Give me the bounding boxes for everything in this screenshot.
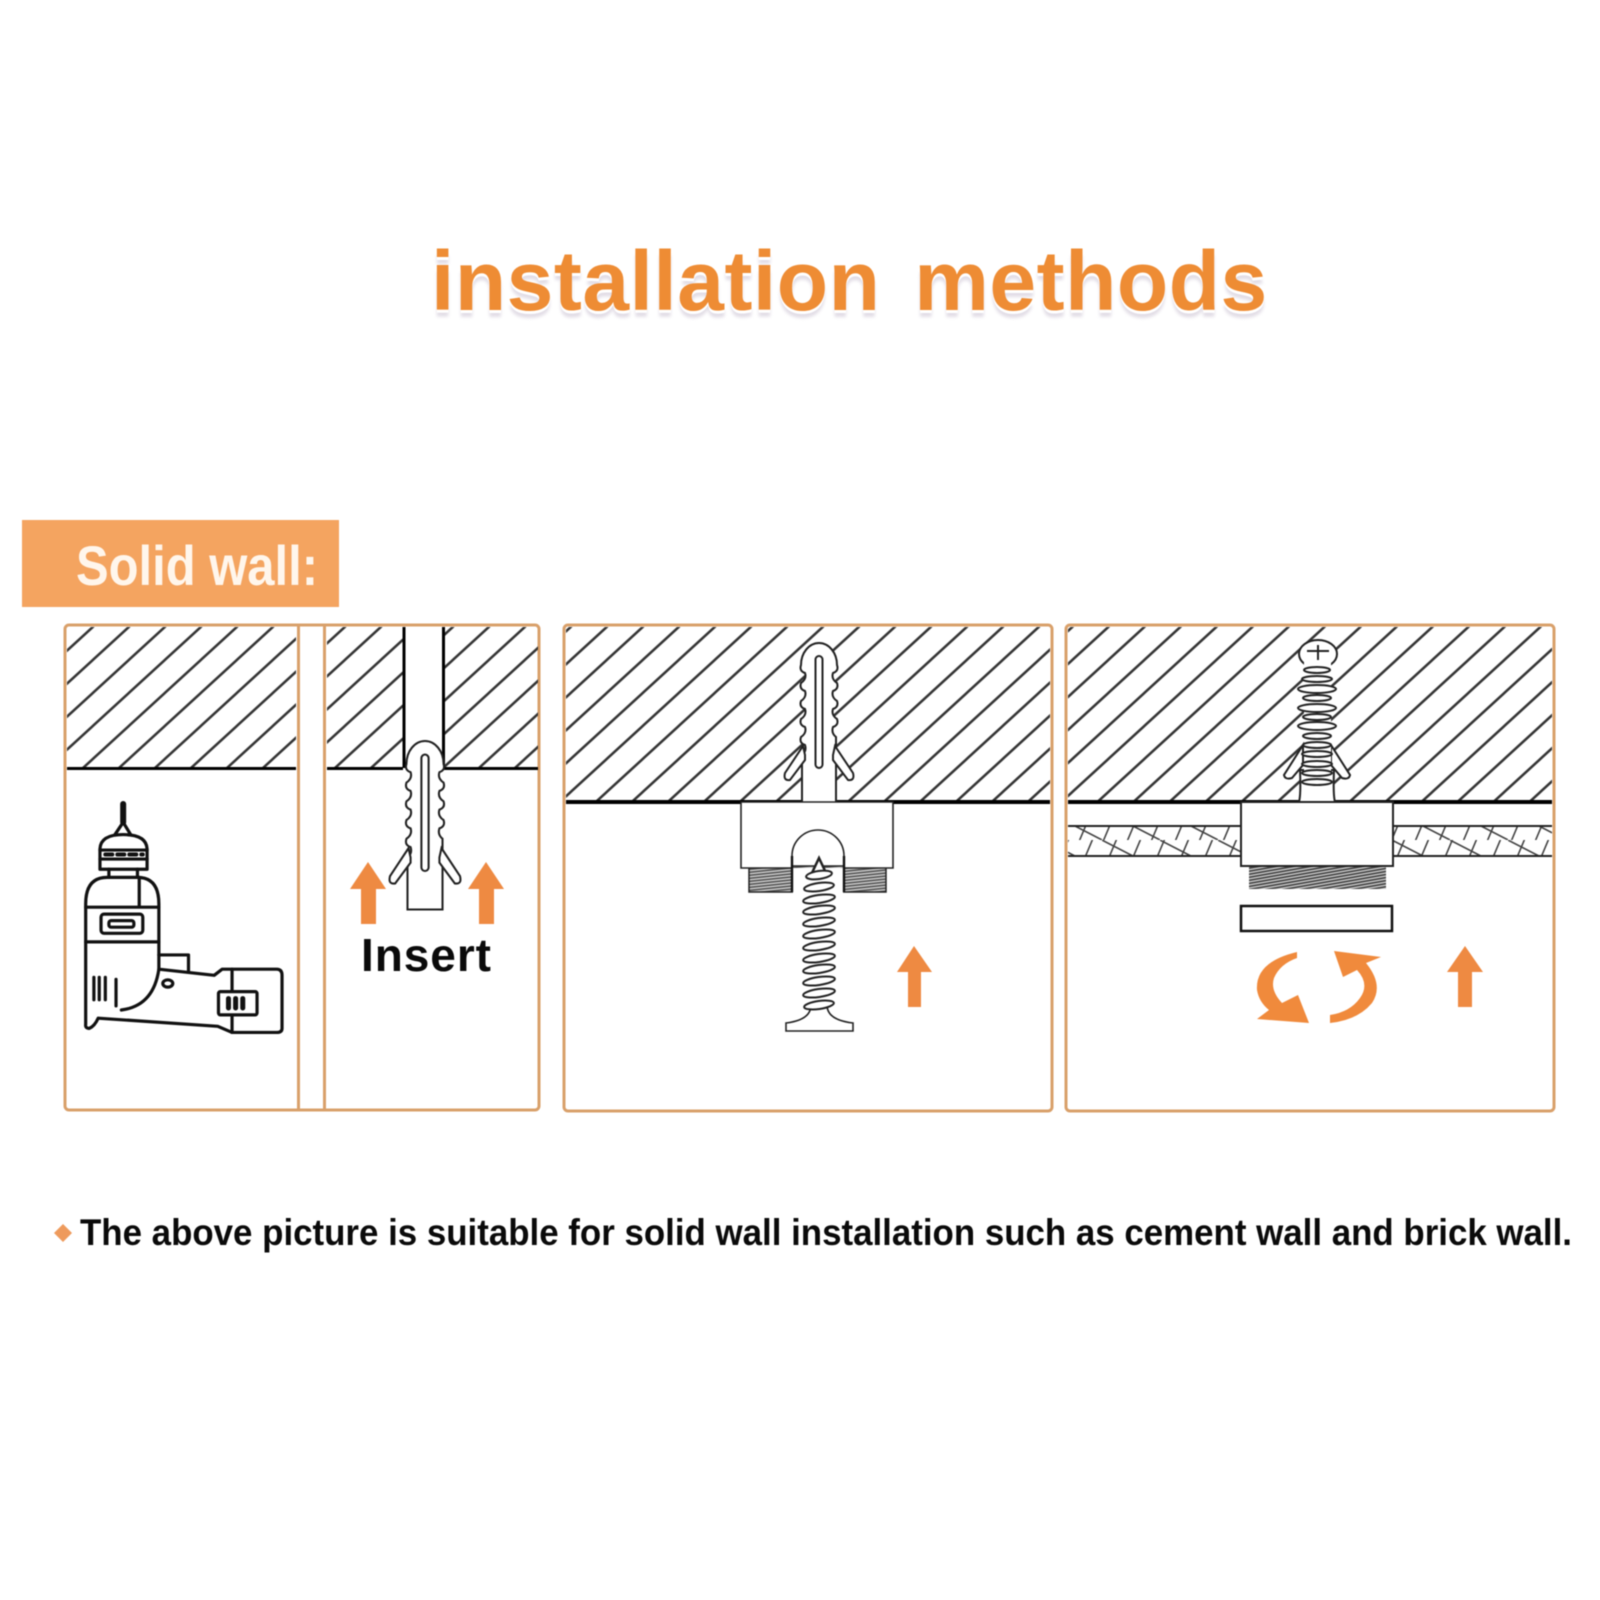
arrow: rotate left <box>1257 952 1309 1023</box>
threaded cap base <box>749 866 886 892</box>
wall hatching, step 1 and 2 <box>67 627 538 768</box>
arrow: rotate right <box>1330 951 1381 1023</box>
screw seated in anchor <box>1284 640 1350 802</box>
screw <box>786 858 853 1031</box>
arrow: up <box>897 946 932 1007</box>
title: installation methods <box>431 234 1268 328</box>
drywall band right <box>1393 826 1552 856</box>
section label: Solid wall <box>22 520 339 607</box>
arrow: up right <box>468 862 504 924</box>
rosette box <box>1241 802 1393 866</box>
wall anchor being inserted <box>390 741 460 909</box>
rosette with slot <box>741 802 893 868</box>
drywall band left <box>1068 826 1241 856</box>
wall anchor in wall <box>785 643 853 805</box>
arrow: up <box>1447 946 1483 1007</box>
panel: fit rosette and screw <box>564 625 1052 1111</box>
section label: Solid wall: Solid wall: <box>76 534 318 597</box>
arrow: up left <box>350 862 386 924</box>
cover cap <box>1241 906 1392 931</box>
wall hatching, step 3 <box>566 627 1050 802</box>
label: Insert: Insert <box>361 929 491 981</box>
panel: tighten cap <box>1066 625 1554 1111</box>
icon: power drill <box>86 804 282 1032</box>
wall hatching, step 4 <box>1068 627 1552 802</box>
threaded base <box>1249 866 1386 889</box>
panel: drill and insert <box>65 625 539 1110</box>
